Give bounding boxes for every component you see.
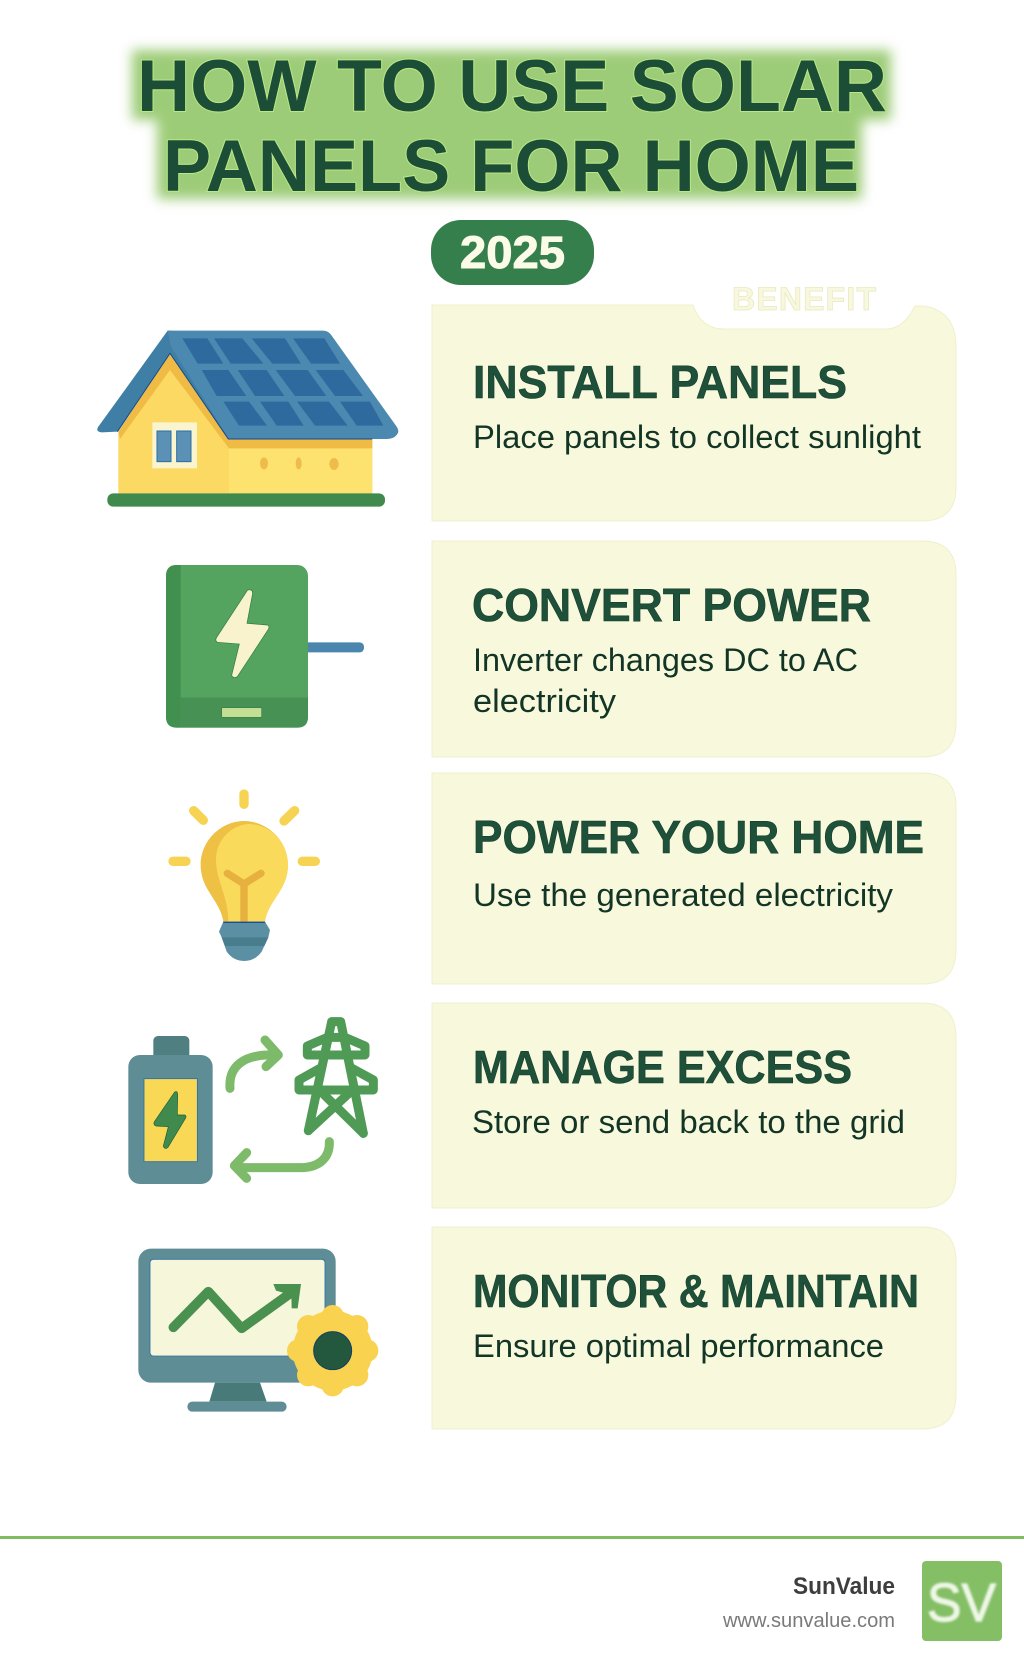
description: Store or send back to the grid [472,1104,905,1140]
heading: MANAGE EXCESS [473,1041,852,1093]
year badge [431,220,594,285]
icon: house with solar panels [97,331,398,507]
heading: CONVERT POWER [472,579,871,631]
panel: convert power [432,541,956,757]
panel: power your home [432,773,956,984]
heading: MONITOR & MAINTAIN [473,1265,919,1317]
year badge: 2025 [460,227,565,278]
title: PANELS FOR HOME [163,126,859,207]
footer brand text [722,1573,895,1632]
footer brand text: SunValue [793,1573,895,1600]
title: HOW TO USE SOLAR [137,46,887,127]
panel: manage excess [432,1003,956,1208]
icon: battery and grid exchange [128,1022,373,1184]
panel: monitor and maintain [432,1227,956,1429]
logo [922,1561,1002,1641]
icon: inverter [166,565,364,728]
description: Inverter changes DC to AC [473,642,858,678]
icon: light bulb [173,794,315,961]
panel: install panels [432,281,956,521]
logo: SV [927,1573,996,1633]
footer divider [0,1536,1024,1539]
description: Use the generated electricity [473,877,893,913]
description: Place panels to collect sunlight [473,419,921,455]
heading: POWER YOUR HOME [473,811,924,863]
icon: monitor with chart and gear [138,1249,373,1412]
benefit label: BENEFIT [732,281,876,317]
heading: INSTALL PANELS [473,356,847,408]
description: Ensure optimal performance [473,1328,884,1364]
title [132,46,891,207]
panel: convert power: electricity [473,683,616,719]
footer brand text: www.sunvalue.com [722,1610,895,1632]
